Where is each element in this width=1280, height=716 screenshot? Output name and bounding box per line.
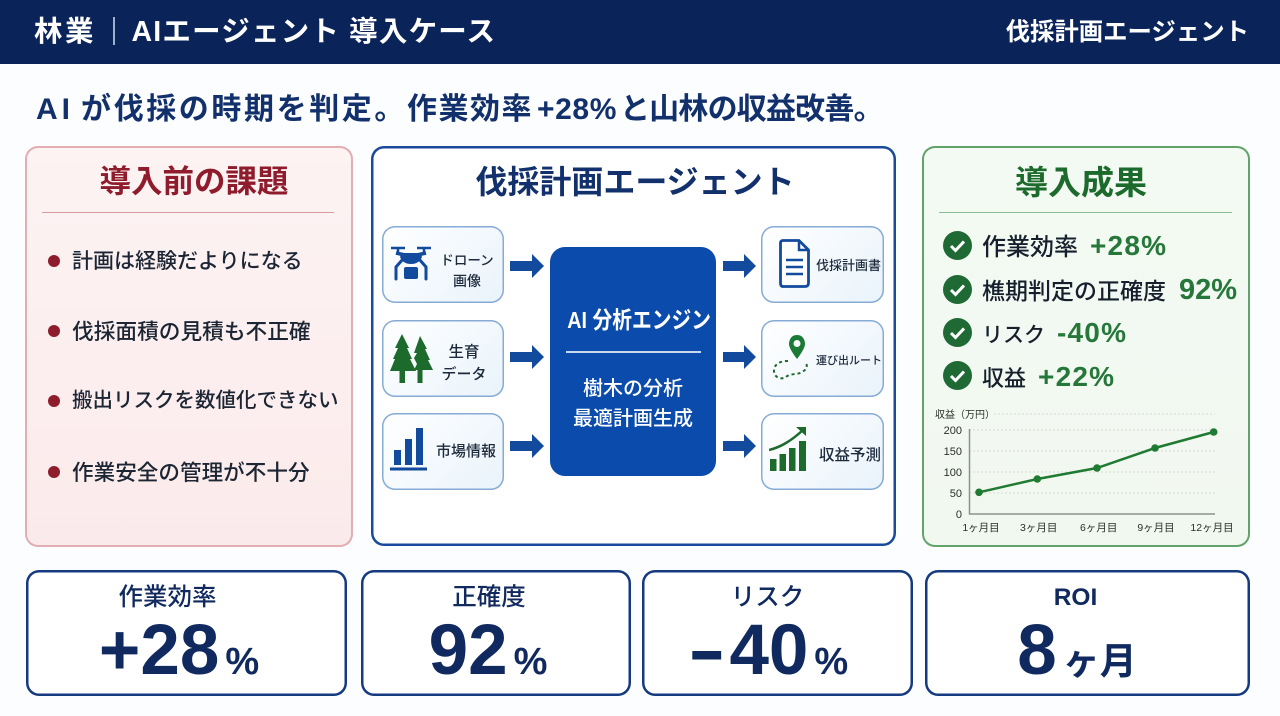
bullet marker — [48, 325, 60, 337]
icon: growth bars — [769, 427, 806, 471]
arrow — [510, 254, 544, 278]
icon: check — [943, 231, 972, 260]
icon: check — [943, 275, 972, 304]
result: risk: リスク -40% — [982, 317, 1127, 348]
icon: check — [943, 318, 972, 347]
panel: results — [922, 146, 1250, 547]
line chart: revenue: 9ヶ月目 — [1137, 522, 1175, 534]
KPI card: ROI — [925, 570, 1250, 696]
result: revenue: 収益 +22% — [982, 361, 1115, 392]
KPI value: - — [688, 611, 726, 690]
panel: agent workflow — [371, 146, 896, 546]
header agent name: 伐採計画エージェント — [1006, 19, 1249, 46]
KPI card: accuracy — [361, 570, 631, 696]
arrow — [510, 345, 544, 369]
bullet marker — [48, 255, 60, 267]
KPI label: ROI — [1054, 584, 1097, 611]
issue 2: 伐採面積の見積も不正確 — [72, 319, 311, 344]
KPI label: 作業効率 — [118, 584, 216, 611]
headline: AIが伐採の時期を判定。作業効率+28%と山林の収益改善。 — [36, 93, 883, 126]
input card: growth data — [382, 320, 504, 397]
icon: route pin — [773, 335, 808, 380]
panel: before-adoption issues — [25, 146, 353, 547]
icon: document — [779, 239, 810, 288]
icon: drone — [391, 246, 431, 280]
KPI value: 40% — [729, 611, 848, 690]
line chart: revenue: 50 — [950, 488, 962, 500]
icon: trees — [390, 334, 433, 383]
line chart: revenue: 3ヶ月目 — [1020, 522, 1057, 534]
KPI value: 92% — [429, 611, 547, 690]
issue 3: 搬出リスクを数値化できない — [72, 389, 338, 412]
heading: agent: 伐採計画エージェント — [475, 164, 795, 200]
divider — [42, 212, 334, 213]
output card: haul route — [761, 320, 884, 397]
KPI value: +28% — [99, 611, 259, 690]
divider — [566, 351, 701, 352]
icon: check — [943, 361, 972, 390]
engine title: AI 分析エンジン — [567, 307, 711, 333]
label: 伐採計画書 — [816, 258, 881, 273]
output card: felling plan — [761, 226, 884, 303]
result: accuracy: 樵期判定の正確度 92% — [982, 274, 1237, 306]
engine function 2: 最適計画生成 — [573, 408, 693, 430]
bullet marker — [48, 466, 60, 478]
KPI card: risk — [642, 570, 913, 696]
line chart: revenue: 6ヶ月目 — [1080, 522, 1117, 534]
KPI label: 正確度 — [452, 584, 526, 611]
divider — [939, 212, 1232, 213]
input card: market info — [382, 413, 504, 490]
icon: bar chart — [390, 428, 427, 470]
line chart: revenue: 1ヶ月目 — [962, 522, 1000, 534]
label: 運び出ルート — [816, 355, 882, 367]
KPI value: 8ヶ月 — [1017, 611, 1137, 690]
arrow — [723, 254, 756, 278]
heading: issues: 導入前の課題 — [99, 163, 288, 199]
bullet marker — [48, 395, 60, 407]
KPI label: リスク — [731, 584, 804, 611]
line chart: revenue: 収益（万円） — [935, 408, 995, 421]
line chart: revenue: 150 — [944, 446, 962, 458]
label: 収益予測 — [819, 447, 881, 464]
issue 1: 計画は経験だよりになる — [72, 250, 303, 273]
line chart: revenue: 200 — [944, 425, 962, 437]
line chart: revenue: 0 — [956, 509, 962, 521]
KPI card: efficiency — [26, 570, 347, 696]
issue 4: 作業安全の管理が不十分 — [72, 460, 310, 485]
output card: revenue forecast — [761, 413, 884, 490]
line chart: revenue — [935, 408, 1234, 534]
label: 画像 — [453, 273, 481, 289]
arrow — [510, 434, 544, 458]
result: efficiency: 作業効率 +28% — [982, 230, 1167, 261]
label: データ — [441, 366, 486, 383]
arrow — [723, 434, 756, 458]
header bar — [0, 0, 1280, 64]
line chart: revenue: 100 — [944, 467, 962, 479]
AI analysis engine box — [550, 247, 716, 476]
arrow — [723, 345, 756, 369]
header title: 林業 AIエージェント 導入ケース — [34, 16, 496, 48]
heading: results: 導入成果 — [1015, 164, 1147, 201]
line chart: revenue: 12ヶ月目 — [1190, 522, 1234, 534]
input card: drone images — [382, 226, 504, 303]
label: ドローン — [440, 253, 494, 268]
engine function 1: 樹木の分析 — [583, 378, 683, 400]
label: 市場情報 — [436, 443, 496, 460]
label: 生育 — [448, 344, 480, 361]
